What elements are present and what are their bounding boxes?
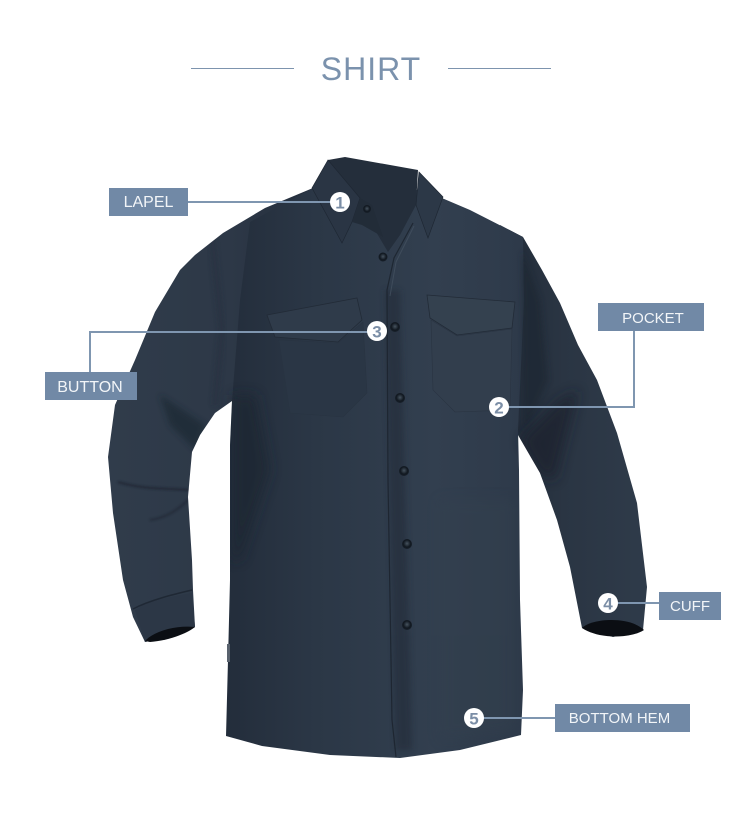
callout: pocket	[489, 303, 704, 418]
body	[226, 188, 524, 758]
callout: button: 3	[372, 322, 382, 342]
right pocket	[427, 295, 515, 335]
left cuff	[135, 593, 195, 642]
callout: bottom hem: BOTTOM HEM	[569, 710, 670, 727]
buttons	[363, 205, 412, 630]
callout: lapel	[109, 188, 350, 216]
callout: cuff	[598, 592, 721, 620]
callout: button	[45, 321, 387, 400]
right collar	[416, 172, 443, 238]
left pocket	[267, 298, 362, 342]
callout: lapel: 1	[335, 194, 345, 212]
callout: cuff: CUFF	[670, 598, 710, 615]
placket edge	[387, 223, 413, 757]
callout: pocket: POCKET	[622, 310, 684, 327]
callout: button: BUTTON	[57, 379, 123, 396]
right cuff	[582, 620, 644, 636]
left collar	[312, 160, 360, 243]
callout: bottom hem: 5	[469, 710, 479, 728]
side tag	[227, 644, 230, 662]
shirt illustration	[108, 157, 647, 758]
callout: pocket: 2	[494, 398, 504, 418]
inner collar	[328, 157, 418, 252]
callout: cuff: 4	[603, 594, 613, 614]
callout: lapel: LAPEL	[124, 194, 174, 211]
callout: bottom hem	[464, 704, 690, 732]
left sleeve	[108, 188, 313, 642]
fold shading	[118, 235, 578, 750]
title: SHIRT	[321, 51, 421, 87]
right sleeve	[480, 225, 647, 637]
